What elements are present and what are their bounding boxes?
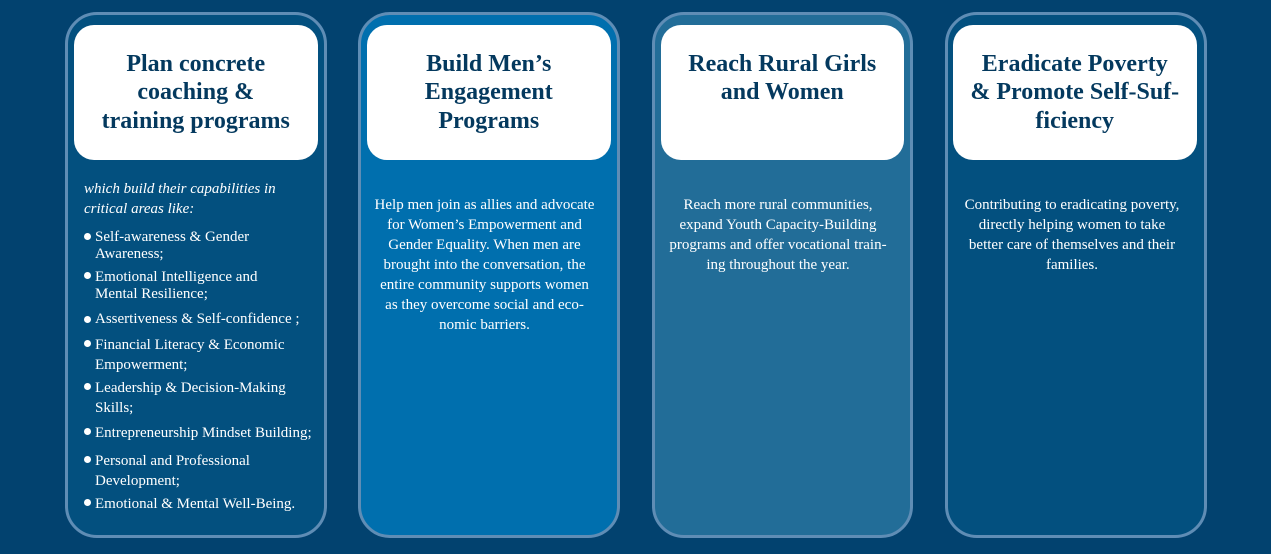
panel: card 3 background	[652, 12, 913, 538]
heading: reach rural girls and women: Reach Rural Girls	[688, 51, 876, 77]
heading: eradicate poverty and promote self-sufficiency: ficiency	[1035, 108, 1114, 134]
heading: reach rural girls and women: and Women	[721, 79, 844, 105]
list: capability areas: Financial Literacy & Economic	[95, 337, 285, 353]
text block: men as allies: for Women’s Empowerment and	[387, 217, 582, 233]
text block: eradicating poverty: Contributing to eradicating poverty,	[965, 197, 1179, 213]
heading: plan concrete coaching and training programs: coaching &	[137, 79, 254, 105]
text block: capabilities intro: critical areas like:	[84, 201, 194, 217]
heading: reach rural girls and women	[660, 25, 904, 160]
list: capability areas: Skills;	[95, 400, 133, 416]
text block: men as allies: brought into the conversation, the	[383, 257, 586, 273]
text block: eradicating poverty: better care of themselves and their	[969, 237, 1175, 253]
text block: men as allies: as they overcome social and eco-	[385, 297, 584, 313]
heading: plan concrete coaching and training programs	[74, 25, 318, 160]
list: capability areas: Assertiveness & Self-confidence ;	[95, 311, 300, 327]
heading: plan concrete coaching and training programs: Plan concrete	[126, 51, 265, 77]
heading: eradicate poverty and promote self-sufficiency	[953, 25, 1196, 160]
list: capability areas: Emotional Intelligence and	[95, 269, 257, 285]
text block: rural communities: programs and offer vocational train-	[669, 237, 887, 253]
heading: plan concrete coaching and training programs: training programs	[102, 108, 290, 134]
panel: card 2 background	[358, 12, 620, 538]
text block: men as allies: entire community supports women	[380, 277, 589, 293]
text block: capabilities intro: which build their capabilities in	[84, 181, 276, 197]
text block: rural communities: ing throughout the year.	[706, 257, 850, 273]
text block: rural communities: Reach more rural communities,	[683, 197, 873, 213]
list: capability areas: Awareness;	[95, 246, 164, 262]
list: capability areas: Development;	[95, 473, 180, 489]
list: capability areas: Emotional & Mental Well-Being.	[95, 496, 295, 512]
text block: men as allies: nomic barriers.	[439, 317, 530, 333]
list: capability areas: Mental Resilience;	[95, 286, 208, 302]
text block: eradicating poverty: families.	[1046, 257, 1098, 273]
panel: card 1 background	[65, 12, 326, 538]
heading: eradicate poverty and promote self-sufficiency: & Promote Self-Suf-	[970, 79, 1179, 105]
heading: build men's engagement programs	[367, 25, 610, 160]
text block: rural communities	[669, 197, 887, 273]
list: capability areas	[84, 229, 312, 512]
heading: build men's engagement programs: Programs	[438, 108, 539, 134]
text block: men as allies: Help men join as allies and advocate	[375, 197, 594, 213]
text block: capabilities intro	[84, 181, 276, 217]
list: capability areas: Self-awareness & Gender	[95, 229, 249, 245]
text block: men as allies	[374, 197, 594, 333]
panel: card 4 background	[945, 12, 1206, 538]
heading: eradicate poverty and promote self-sufficiency: Eradicate Poverty	[982, 51, 1168, 77]
list: capability areas: Empowerment;	[95, 357, 187, 373]
heading: build men's engagement programs: Build Men’s	[426, 51, 551, 77]
text block: eradicating poverty	[965, 197, 1179, 273]
list: capability areas: Leadership & Decision-Making	[95, 380, 286, 396]
list: capability areas: Entrepreneurship Mindset Building;	[95, 425, 312, 441]
text block: rural communities: expand Youth Capacity-Building	[679, 217, 877, 233]
text block: eradicating poverty: directly helping women to take	[979, 217, 1165, 233]
heading: build men's engagement programs: Engagement	[425, 79, 553, 105]
text block: men as allies: Gender Equality. When men are	[388, 237, 581, 253]
list: capability areas: Personal and Professional	[95, 453, 250, 469]
